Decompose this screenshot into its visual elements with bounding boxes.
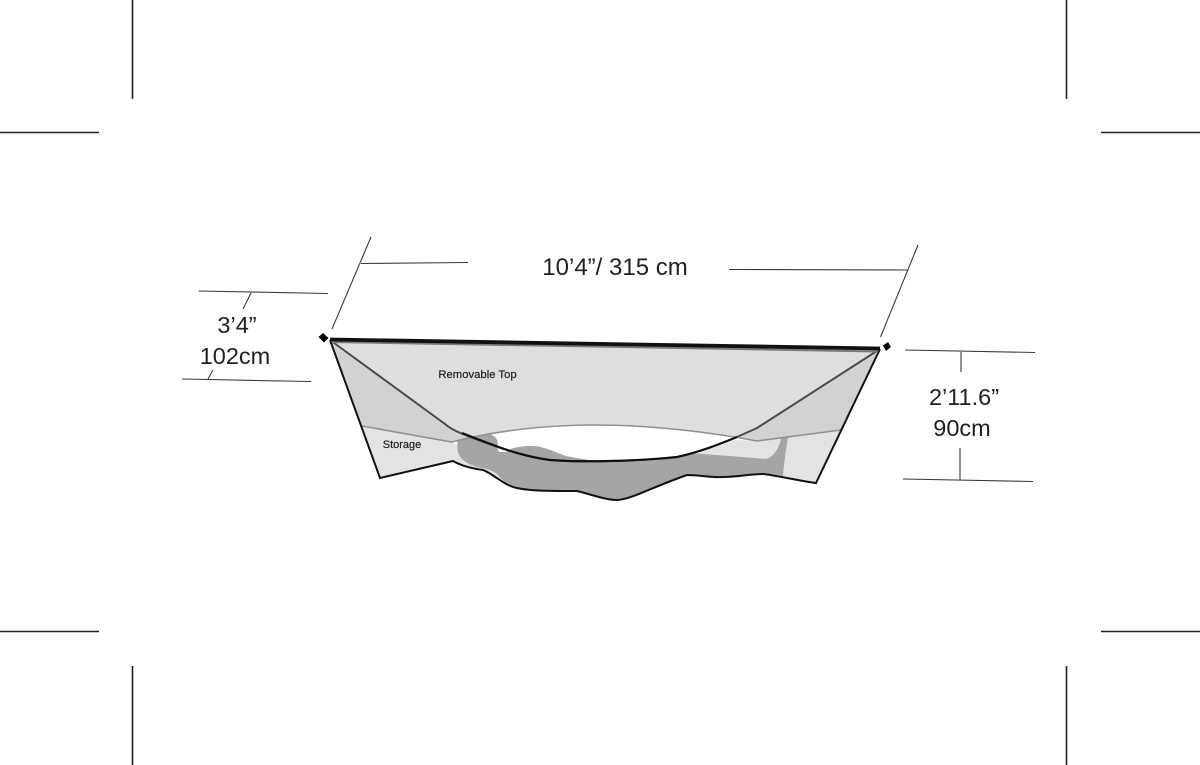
right height label [929, 384, 999, 441]
left height label [200, 312, 270, 369]
right end clip [883, 342, 891, 351]
storage and lower panel [330, 340, 880, 500]
left end clip [318, 333, 328, 342]
person silhouette [457, 430, 788, 500]
width label: 10’4”/ 315 cm [542, 254, 688, 281]
top hem shading [332, 342, 878, 352]
dimension lines: right height [903, 350, 1035, 482]
opening [452, 425, 757, 470]
right height label: 90cm [933, 415, 991, 441]
hammock body [318, 333, 891, 500]
dimension lines: width [332, 237, 918, 337]
left height label: 102cm [200, 343, 270, 369]
label: removable top: Removable Top [438, 369, 517, 381]
top panel lower edge [362, 425, 841, 442]
left height label: 3’4” [217, 312, 257, 338]
label: storage: Storage [383, 439, 421, 451]
sag line [330, 340, 880, 461]
hammock outline [330, 340, 880, 500]
removable top panel [330, 340, 880, 442]
top ridge line [330, 340, 880, 348]
sag line dark lower section [462, 433, 737, 461]
right height label: 2’11.6” [929, 384, 999, 410]
dimension lines: left height [182, 291, 328, 382]
overlap panels [330, 340, 473, 442]
